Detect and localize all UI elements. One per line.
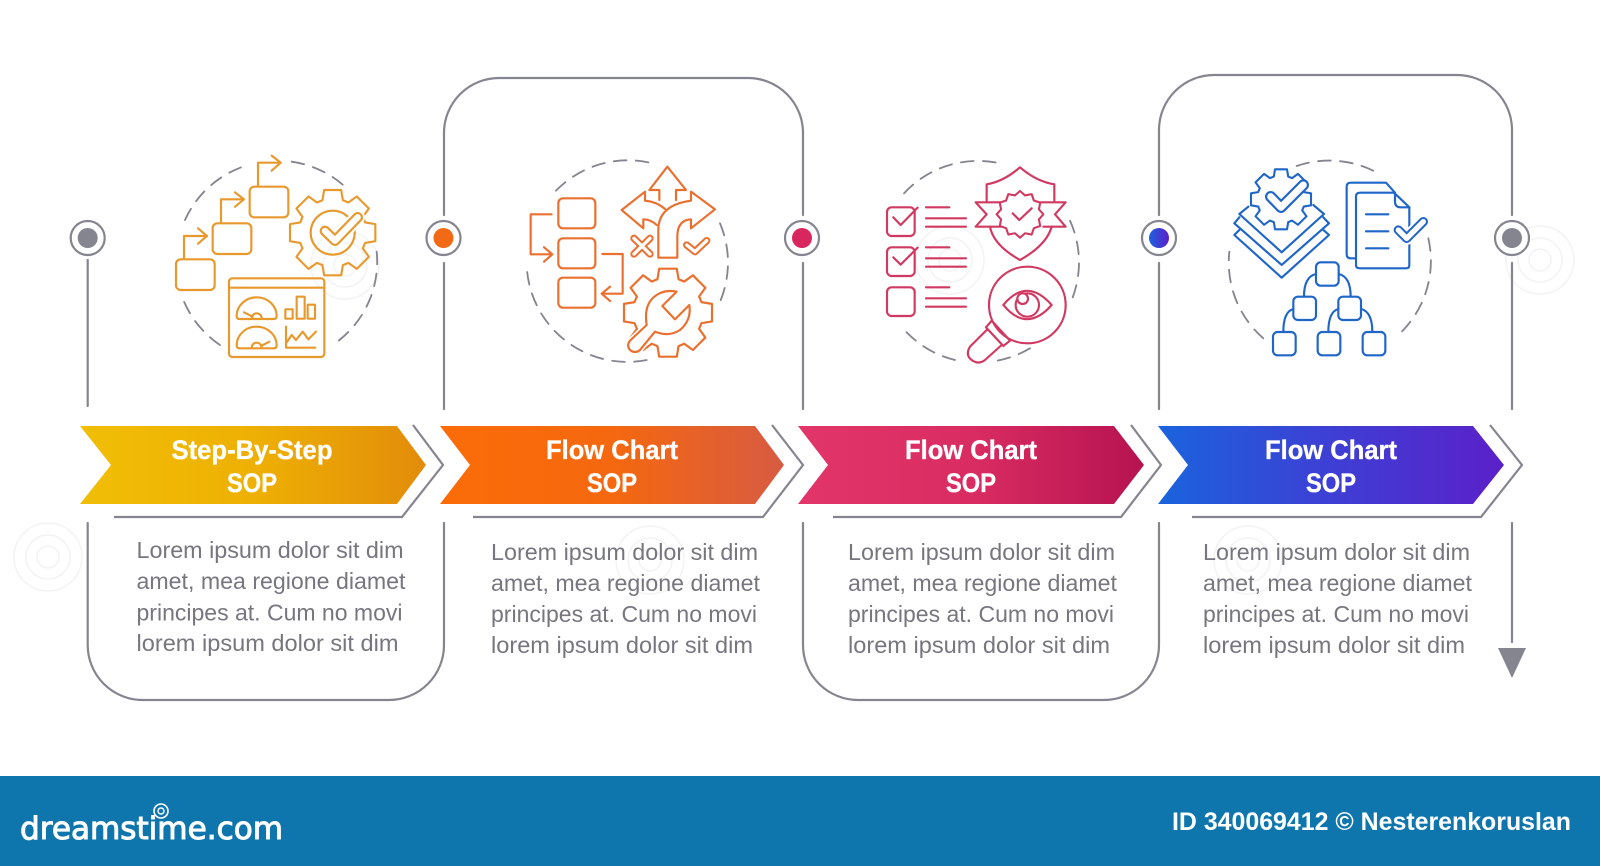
heading: step 2: Flow Chart	[546, 435, 678, 465]
chevron banner: step 4	[1158, 426, 1504, 504]
chevron banner: step 2	[440, 426, 784, 504]
chevron outline: step 1	[114, 425, 443, 517]
body text: step 2: amet, mea regione diamet	[491, 570, 761, 596]
heading: step 3: SOP	[946, 468, 996, 498]
chevron outline: step 3	[833, 425, 1161, 517]
body text: step 1: principes at. Cum no movi	[136, 600, 402, 626]
panel: step 2 Flow Chart SOP	[440, 160, 803, 658]
body text: step 2: lorem ipsum dolor sit dim	[491, 632, 753, 658]
body text: step 4: amet, mea regione diamet	[1203, 570, 1473, 596]
body text: step 4: principes at. Cum no movi	[1203, 601, 1469, 627]
logo spiral icon	[154, 804, 168, 818]
icon: checklist, shield badge and magnifier eye	[887, 161, 1079, 362]
panel: step 3 Flow Chart SOP	[798, 161, 1161, 658]
connector frame: rounded timeline outline	[88, 75, 1512, 700]
chevron outline: step 2	[473, 425, 803, 517]
heading: step 1: Step-By-Step	[172, 435, 332, 465]
body text: step 1: amet, mea regione diamet	[136, 568, 406, 594]
footer bar	[0, 776, 1600, 866]
image id and author credit: ID 340069412 © Nesterenkoruslan	[1172, 808, 1571, 836]
timeline nodes	[71, 221, 1529, 255]
body text: step 3: Lorem ipsum dolor sit dim	[848, 539, 1115, 565]
body text: step 3: lorem ipsum dolor sit dim	[848, 632, 1110, 658]
body text: step 1: lorem ipsum dolor sit dim	[136, 630, 398, 656]
heading: step 4: SOP	[1306, 468, 1356, 498]
body text: step 2: Lorem ipsum dolor sit dim	[491, 539, 758, 565]
logo wordmark: dreamstime.com	[20, 811, 283, 847]
icon: flow chart, route arrows and wrench gear	[527, 160, 728, 362]
icon: layered gear, documents and hierarchy chart	[1229, 161, 1431, 355]
body text: step 3: principes at. Cum no movi	[848, 601, 1114, 627]
chevron banner: step 1	[80, 426, 426, 504]
body text: step 1: Lorem ipsum dolor sit dim	[136, 537, 404, 563]
body text: step 2: principes at. Cum no movi	[491, 601, 757, 627]
arrow head: end of timeline	[1498, 648, 1526, 678]
panel: step 4 Flow Chart SOP	[1158, 161, 1522, 658]
heading: step 3: Flow Chart	[905, 435, 1037, 465]
body text: step 4: lorem ipsum dolor sit dim	[1203, 632, 1465, 658]
chevron banner: step 3	[798, 426, 1144, 504]
icon: flow steps, gear check and dashboard	[176, 156, 377, 357]
panel: step 1 Step-By-Step SOP	[80, 156, 443, 656]
heading: step 4: Flow Chart	[1265, 435, 1397, 465]
chevron outline: step 4	[1192, 425, 1522, 517]
heading: step 1: SOP	[227, 468, 277, 498]
body text: step 3: amet, mea regione diamet	[848, 570, 1118, 596]
body text: step 4: Lorem ipsum dolor sit dim	[1203, 539, 1470, 565]
heading: step 2: SOP	[587, 468, 637, 498]
